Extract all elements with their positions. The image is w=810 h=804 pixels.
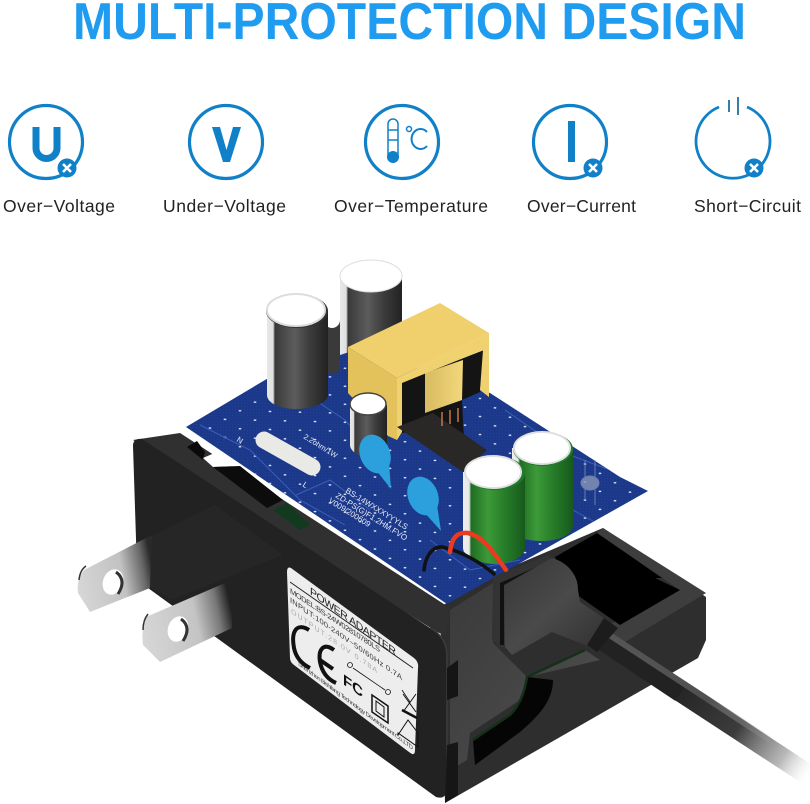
label: over-voltage: Over−Voltage <box>3 196 115 216</box>
case: front face <box>133 439 458 803</box>
label text <box>290 585 413 752</box>
strain relief <box>492 555 618 655</box>
circuit board <box>186 345 648 604</box>
plug prong: lower <box>142 580 232 662</box>
case: rear body <box>133 433 706 803</box>
icon: over-temperature <box>366 106 438 178</box>
board silkscreen text: BS-14WXXXYYYLS <box>344 486 409 532</box>
adapter illustration <box>78 260 810 803</box>
board silkscreen text <box>235 432 409 542</box>
label text: INPUT:100-240V~50/60Hz 0.7A <box>290 595 402 682</box>
label text: OUTPUT:28.0V 0.78A <box>291 607 378 675</box>
label text: MODEL:BS-24W02810780LS <box>290 587 380 655</box>
ceramic capacitor 1 <box>354 430 396 489</box>
capacitor: large black rear <box>340 260 402 355</box>
label: over-temperature: Over−Temperature <box>334 196 488 216</box>
plug prong: upper <box>78 505 283 612</box>
label text: Shenzhen Bishilang Technology Development Co.,LTD <box>298 661 413 752</box>
certification marks <box>293 627 418 747</box>
capacitor: small black <box>350 393 387 458</box>
rating label <box>287 568 418 754</box>
capacitor: green front <box>463 456 525 564</box>
icon: over-current <box>534 106 606 178</box>
icon: short-circuit <box>696 97 770 178</box>
fuse <box>264 440 312 467</box>
capacitor: green rear <box>512 432 573 541</box>
wires <box>424 533 506 574</box>
cord <box>600 634 810 776</box>
board silkscreen text: V009/200609 <box>327 496 373 529</box>
label: over-current: Over−Current <box>527 196 636 216</box>
certification marks: FC <box>343 671 363 702</box>
icon: over-voltage <box>10 106 82 178</box>
label text: POWER ADAPTER <box>310 585 396 659</box>
transformer <box>348 303 489 472</box>
label: under-voltage: Under−Voltage <box>163 196 286 216</box>
icon row: protections <box>3 97 801 216</box>
board silkscreen text: N <box>235 435 245 446</box>
LED <box>581 460 599 505</box>
board silkscreen text: 2.2ohm/1W <box>302 432 340 460</box>
power cord and strain relief <box>492 555 810 776</box>
board silkscreen text: L <box>301 480 310 490</box>
label: short-circuit: Short−Circuit <box>694 196 801 216</box>
board silkscreen text: ZD-PS(G)F1.2HM.FVO <box>334 491 409 542</box>
capacitor: small rear <box>324 312 340 374</box>
icon: under-voltage <box>190 106 262 178</box>
ceramic capacitor 2 <box>402 472 444 531</box>
capacitor: large black front <box>266 294 328 409</box>
